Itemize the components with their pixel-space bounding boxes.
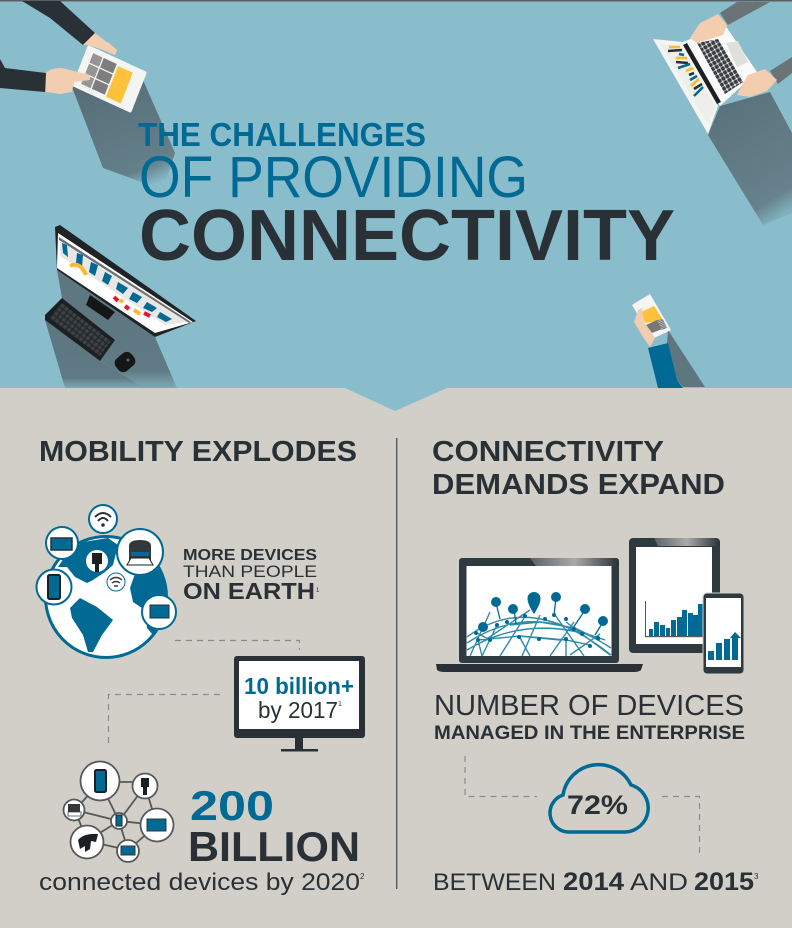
icon: hands on laptop	[653, 2, 792, 225]
text: number of devices managed in the enterprise: MANAGED IN THE ENTERPRISE	[434, 723, 745, 744]
icon: laptop, tablet and phone	[436, 538, 744, 674]
icon: hands holding tablet	[0, 1, 175, 190]
laptop	[436, 558, 643, 672]
phone	[703, 593, 744, 674]
icon: device network	[64, 762, 174, 862]
text: number of devices managed in the enterprise	[434, 690, 745, 744]
panel: connectivity demands expand	[432, 436, 759, 896]
dashed connector: cloud to text	[662, 796, 700, 856]
icon: monitor with 10 billion: 1	[338, 701, 342, 708]
stat: 200 billion: 200	[190, 782, 274, 829]
dashed connector: text to cloud	[465, 756, 537, 796]
text: more devices than people on earth: 1	[316, 588, 320, 594]
center divider	[396, 438, 397, 889]
text: more devices than people on earth: THAN PEOPLE	[183, 563, 317, 581]
title: CONNECTIVITY	[139, 196, 675, 276]
tablet	[629, 538, 720, 653]
text: between 2014 and 2015: AND	[630, 869, 688, 896]
heading: connectivity demands expand: CONNECTIVITY	[432, 436, 664, 468]
icon: monitor with 10 billion: 10 billion+	[244, 673, 354, 699]
icon: desktop monitor with keyboard and mouse	[45, 225, 196, 388]
icon: cloud with 72%: 72%	[567, 790, 628, 820]
text: number of devices managed in the enterprise: NUMBER OF DEVICES	[434, 690, 744, 722]
lower panel background with notch	[0, 388, 792, 928]
heading: connectivity demands expand: DEMANDS EXPAND	[432, 469, 725, 501]
icon: hand holding phone	[632, 294, 705, 388]
dashed connector: globe to monitor	[175, 640, 300, 650]
icon: globe with device bubbles	[36, 505, 176, 658]
icon: monitor with 10 billion: by 2017	[258, 697, 338, 723]
heading: connectivity demands expand	[432, 436, 725, 501]
text: between 2014 and 2015: 3	[754, 872, 759, 881]
icon: monitor with 10 billion	[234, 656, 365, 752]
text: between 2014 and 2015: BETWEEN	[433, 869, 556, 896]
stat: 200 billion	[188, 782, 360, 870]
text: connected devices by 2020: connected devices by 2020	[39, 869, 360, 896]
text: more devices than people on earth	[183, 547, 320, 604]
text: more devices than people on earth: ON EARTH	[183, 578, 315, 604]
text: more devices than people on earth: MORE DEVICES	[183, 547, 317, 564]
stat: 200 billion: BILLION	[188, 823, 360, 870]
title: OF PROVIDING	[139, 145, 528, 210]
title	[138, 116, 675, 276]
text: between 2014 and 2015: 2015	[694, 868, 754, 896]
dashed connector: monitor to network	[108, 694, 220, 748]
heading: mobility explodes: MOBILITY EXPLODES	[39, 436, 357, 468]
panel: mobility explodes	[36, 436, 365, 896]
text: between 2014 and 2015: 2014	[563, 868, 624, 896]
icon: cloud with 72%	[550, 765, 648, 832]
text: connected devices by 2020: 2	[360, 872, 365, 881]
text: between 2014 and 2015	[433, 868, 759, 896]
title: THE CHALLENGES	[138, 116, 426, 153]
hero background	[0, 0, 792, 412]
